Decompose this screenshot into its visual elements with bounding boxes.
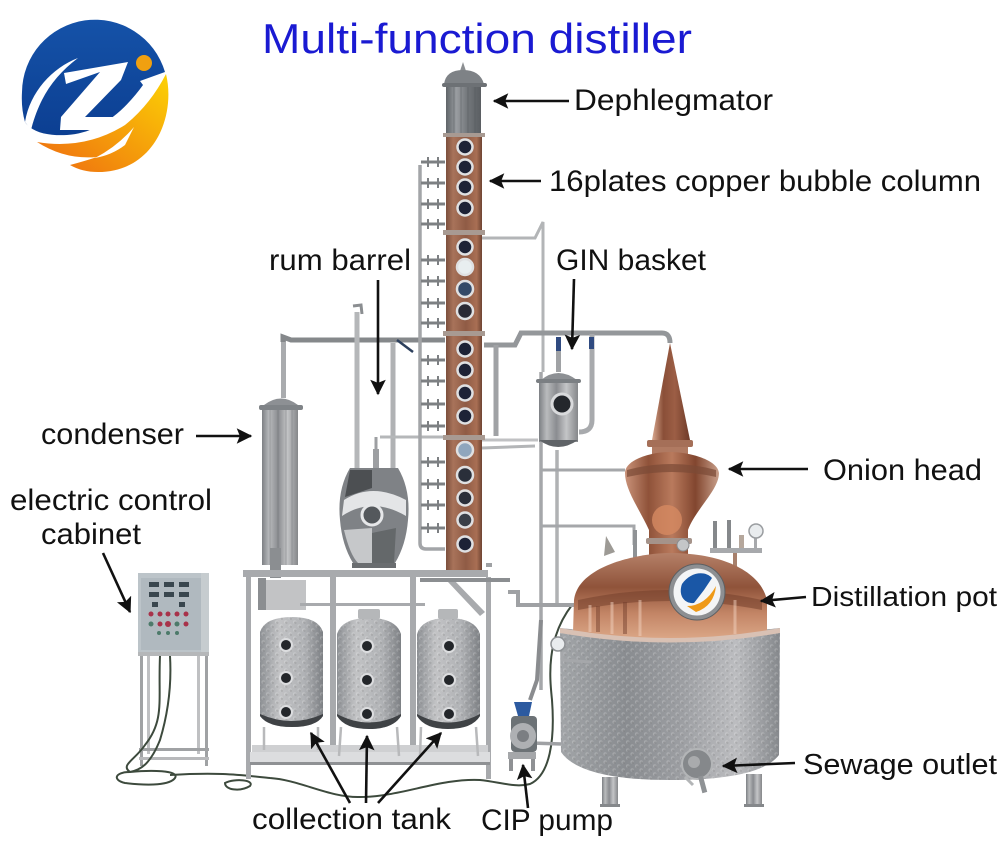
label: electric control cabinet: cabinet <box>41 518 142 551</box>
label: electric control cabinet <box>10 484 212 551</box>
dephlegmator <box>442 62 487 134</box>
jacket gauge <box>551 637 590 662</box>
distillation pot dome <box>560 553 780 642</box>
onion head still <box>625 343 719 558</box>
rum barrel <box>339 449 409 568</box>
label: Onion head: Onion head <box>823 454 982 487</box>
collection tank 1 <box>260 617 323 750</box>
label: Distillation pot: Distillation pot <box>811 581 997 612</box>
label: electric control cabinet: electric control <box>10 484 212 517</box>
GIN basket <box>536 337 594 447</box>
label: rum barrel: rum barrel <box>269 244 411 277</box>
emblem on pot <box>669 564 725 620</box>
label: collection tank: collection tank <box>252 803 452 836</box>
electric control cabinet <box>138 573 209 766</box>
condenser <box>258 340 306 610</box>
gauges and fittings <box>604 520 763 567</box>
CIP pump <box>508 702 537 771</box>
label: condenser: condenser <box>41 418 184 451</box>
column side rack <box>420 157 445 549</box>
title: Multi-function distiller <box>262 15 692 62</box>
frame <box>243 570 510 779</box>
copper column body <box>446 134 482 570</box>
label: Sewage outlet: Sewage outlet <box>803 749 997 781</box>
sewage outlet valve <box>682 749 712 793</box>
collection tank 2 <box>337 609 401 756</box>
label: GIN basket: GIN basket <box>556 244 707 277</box>
collection tank 3 <box>417 609 480 756</box>
distillate pipework <box>283 222 670 744</box>
arrows <box>103 101 808 808</box>
distillation column <box>442 62 487 570</box>
label: CIP pump: CIP pump <box>481 804 613 837</box>
cables on floor <box>117 605 572 797</box>
label: Dephlegmator: Dephlegmator <box>574 84 773 117</box>
sight glasses <box>457 140 473 552</box>
logo <box>22 20 168 172</box>
label: 16plates copper bubble column: 16plates copper bubble column <box>549 165 981 198</box>
jacket <box>560 628 780 807</box>
